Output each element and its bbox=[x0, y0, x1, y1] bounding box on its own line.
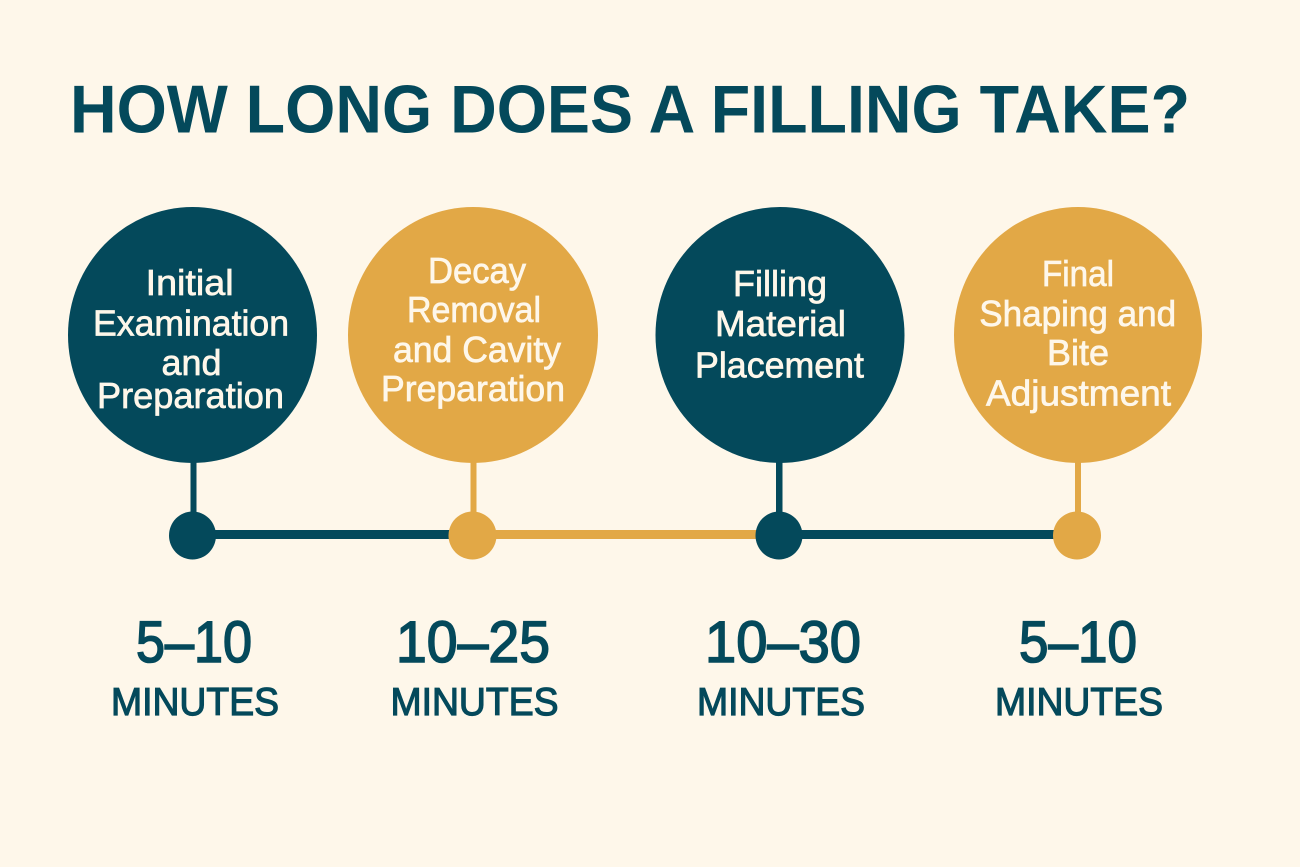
step 1 circle bbox=[68, 207, 317, 463]
step 2 circle bbox=[348, 207, 598, 463]
step 3 duration: 10–30 bbox=[705, 610, 861, 675]
step 1 duration bbox=[111, 610, 279, 724]
step 3 circle bbox=[656, 207, 904, 463]
timeline line bbox=[193, 530, 1077, 539]
step 1 node bbox=[169, 512, 216, 560]
step 3 node bbox=[756, 512, 802, 560]
step 4 label: Shaping and bbox=[979, 293, 1176, 334]
title: HOW LONG DOES A FILLING TAKE? bbox=[70, 72, 1190, 148]
step 1 duration: MINUTES bbox=[111, 681, 279, 724]
step 1 label: and bbox=[162, 342, 222, 383]
step 2 label: Decay bbox=[428, 250, 526, 291]
step 3: filling material bbox=[656, 207, 904, 724]
step 2 duration bbox=[390, 610, 558, 724]
step 1 label: Examination bbox=[93, 302, 289, 344]
step 4 label: Bite bbox=[1047, 332, 1109, 373]
step 2 label bbox=[381, 250, 565, 409]
step 1 duration: 5–10 bbox=[136, 610, 252, 675]
step 2 node bbox=[448, 512, 496, 560]
step 3 label bbox=[695, 263, 864, 386]
step 1: initial examination bbox=[68, 207, 317, 724]
step 2 label: Removal bbox=[407, 289, 541, 330]
step 1 label: Initial bbox=[146, 262, 234, 303]
step 3 label: Material bbox=[715, 303, 846, 344]
step 2 duration: 10–25 bbox=[396, 610, 550, 675]
step 1 label: Preparation bbox=[97, 375, 284, 416]
step 1 label bbox=[93, 262, 289, 416]
step 3 label: Placement bbox=[695, 344, 864, 386]
step 4: final shaping bbox=[954, 207, 1202, 724]
step 2 duration: MINUTES bbox=[390, 681, 558, 724]
step 2 label: Preparation bbox=[381, 368, 565, 409]
step 4 label: Adjustment bbox=[986, 372, 1171, 414]
step 4 label: Final bbox=[1042, 253, 1114, 294]
step 4 duration: MINUTES bbox=[995, 681, 1163, 724]
step 4 duration: 5–10 bbox=[1019, 610, 1137, 675]
step 3 duration bbox=[697, 610, 865, 724]
step 3 duration: MINUTES bbox=[697, 681, 865, 724]
step 2 label: and Cavity bbox=[393, 329, 561, 370]
step 4 circle bbox=[954, 207, 1202, 463]
step 2: decay removal bbox=[348, 207, 598, 724]
step 4 node bbox=[1053, 512, 1101, 560]
step 4 label bbox=[979, 253, 1176, 414]
step 3 label: Filling bbox=[733, 263, 827, 304]
step 4 duration bbox=[995, 610, 1163, 724]
